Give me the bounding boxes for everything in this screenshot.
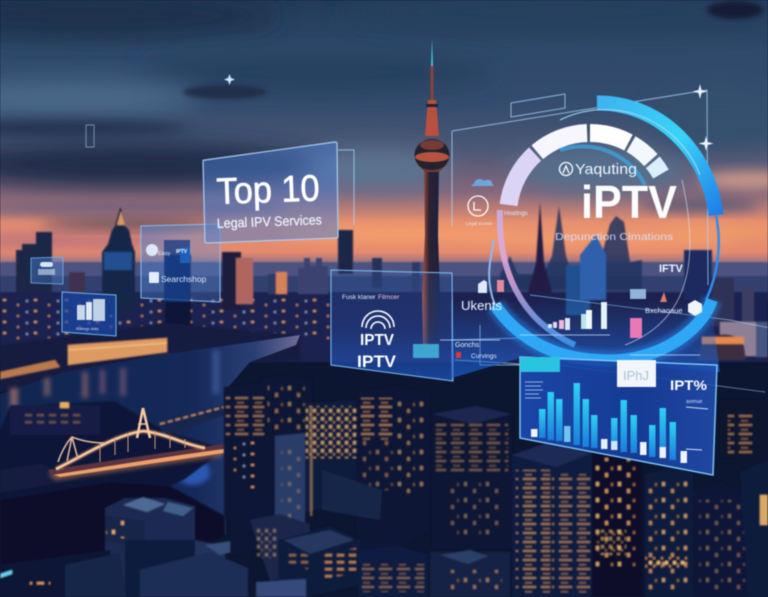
panel: lower bar chart: IPhJ xyxy=(623,368,649,383)
icon: broadcast arcs xyxy=(362,311,394,329)
icon: thumbs xyxy=(478,280,487,293)
panel: IPTV logos card: IPTV xyxy=(360,332,394,349)
clouds xyxy=(0,0,768,248)
icon: cloud xyxy=(472,179,494,186)
frame: holographic thin lines xyxy=(86,90,768,392)
panel: bar chart card left xyxy=(62,292,116,336)
near left waterfront xyxy=(0,323,300,392)
ring: white segmented gauge xyxy=(509,133,661,205)
icon: cube xyxy=(688,300,702,316)
subheading: Legal IPTV Services: Legal IPV Services xyxy=(217,212,322,231)
panel: IPTV main labels: Hoatings xyxy=(504,211,528,217)
panel: IPTV main labels: IFTV xyxy=(659,263,683,275)
panel: IPTV logos card: IPTV xyxy=(357,352,397,371)
panel: IPTV logos card: Filmcer xyxy=(378,294,400,301)
TV tower xyxy=(414,38,450,345)
panel: IPTV main labels: Gonchs xyxy=(455,342,480,349)
ring: outer cyan hud xyxy=(489,103,719,361)
panel: IPTV logos card: Fusk klaner xyxy=(342,294,376,301)
panel: IPTV main labels xyxy=(440,84,714,360)
panel: lower glass under ring xyxy=(452,300,720,378)
panel: service list card: IPTV xyxy=(176,249,188,255)
panel: IPTV main labels: Legal access xyxy=(466,221,493,226)
icon: location badge xyxy=(560,162,572,176)
panel: IPTV main labels: iPTV xyxy=(581,176,677,228)
heading: Top 10: Top 10 xyxy=(216,167,320,212)
panel: lower bar chart: avenue xyxy=(686,399,703,405)
panel: IPTV main labels: Curvings xyxy=(471,353,497,360)
panel: Top 10 heading card xyxy=(203,142,338,243)
panel: IPTV main labels: Depunction Cimations xyxy=(555,231,673,243)
panel: small data card left xyxy=(31,257,63,284)
icon: chat badge xyxy=(468,196,488,216)
panel: IPTV logos card xyxy=(331,270,453,381)
panel: IPTV main labels: Ukents xyxy=(461,298,502,313)
sky background xyxy=(0,0,768,300)
left bank xyxy=(0,401,225,597)
panel: IPTV main labels: Yaquting xyxy=(575,161,637,178)
panel: lower bar chart: IPT% xyxy=(670,377,708,393)
bridge xyxy=(48,408,225,480)
river xyxy=(0,335,300,535)
foreground buildings xyxy=(0,375,768,597)
panel: lower bar chart xyxy=(520,357,717,475)
river reflections xyxy=(10,350,220,485)
distant skyline xyxy=(0,202,768,362)
bars xyxy=(531,383,687,463)
panel: service list card: Easy xyxy=(158,251,170,257)
panel: bar chart card left: Ratings data xyxy=(76,326,99,331)
panel: service list card xyxy=(141,224,220,302)
panel: service list card: Searchshop xyxy=(161,274,207,284)
panel: IPTV main labels: Bxchaoaue xyxy=(645,306,683,315)
